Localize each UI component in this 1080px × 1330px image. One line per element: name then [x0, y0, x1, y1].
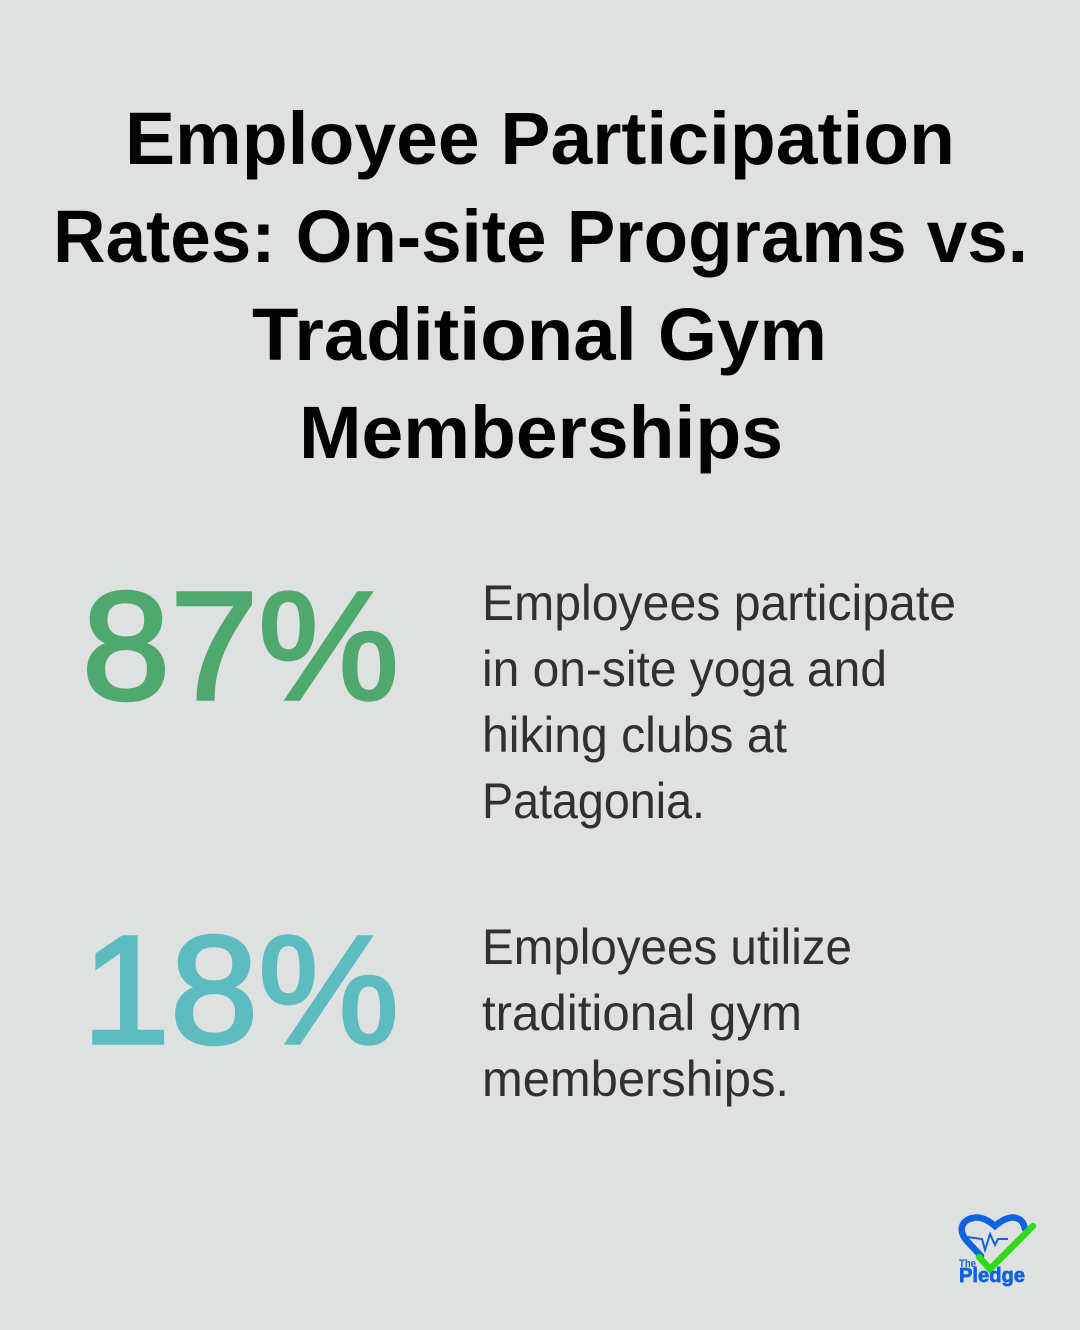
- stat value: 87%: 87%: [82, 560, 399, 732]
- stat description: on-site participation: in on-site yoga and: [482, 641, 887, 697]
- logo: The Pledge: Pledge: [959, 1265, 1025, 1287]
- logo text: The: [959, 1258, 976, 1270]
- stat description: on-site participation: Patagonia.: [482, 773, 705, 829]
- stat description: gym memberships: memberships.: [482, 1051, 789, 1107]
- icon: pulse line: [967, 1234, 1008, 1250]
- title: Employee Participation: [125, 97, 955, 180]
- icon: heart outline: [962, 1218, 1025, 1256]
- icon: check mark: [979, 1226, 1033, 1269]
- title: Rates: On-site Programs vs.: [53, 195, 1028, 278]
- logo: The Pledge: [959, 1218, 1033, 1287]
- title: [53, 97, 1028, 474]
- title: Traditional Gym: [252, 293, 827, 376]
- stat: 18% traditional gym: [82, 904, 852, 1107]
- stat description: gym memberships: traditional gym: [482, 985, 802, 1041]
- stat value: 18%: 18%: [82, 904, 399, 1076]
- stat description: on-site participation: hiking clubs at: [482, 707, 787, 763]
- stat description: on-site participation: [482, 575, 956, 829]
- stat description: gym memberships: Employees utilize: [482, 919, 852, 975]
- stat description: gym memberships: [482, 919, 852, 1107]
- stat description: on-site participation: Employees participate: [482, 575, 956, 631]
- title: Memberships: [299, 391, 783, 474]
- stat: 87% on-site programs: [82, 560, 956, 829]
